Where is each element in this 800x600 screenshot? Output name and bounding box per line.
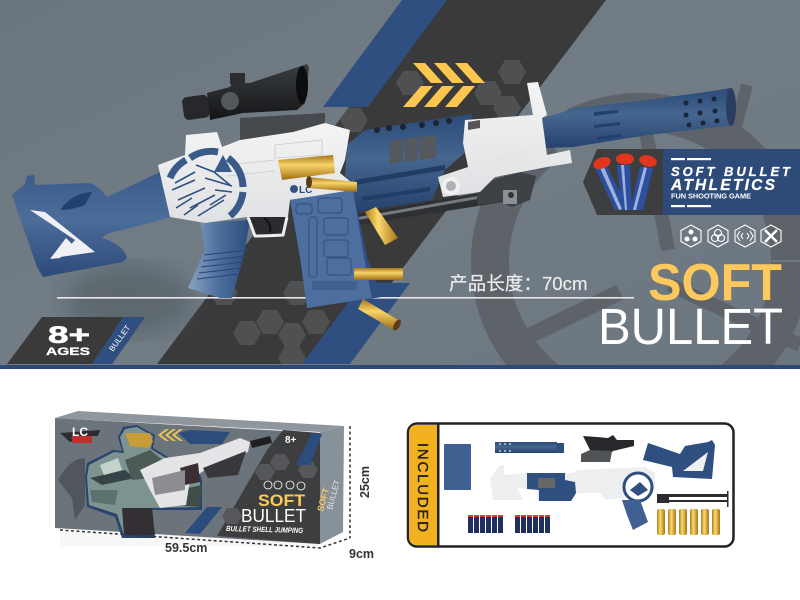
receiver <box>158 123 357 223</box>
bullet tag: BULLET <box>107 323 132 353</box>
box logo: LC <box>72 425 88 439</box>
blue title panel <box>663 149 800 215</box>
age number: 8+ <box>48 322 90 349</box>
soldier figure <box>85 425 202 538</box>
part: stock <box>643 440 715 479</box>
box dragon watermark <box>58 458 85 520</box>
magazine <box>290 190 382 308</box>
darts <box>592 153 658 210</box>
part: bipod <box>657 491 728 507</box>
pistol grip <box>188 220 250 298</box>
length label: 产品长度：70cm <box>449 273 587 294</box>
soldier rifle <box>140 436 272 508</box>
part: darts group one <box>468 515 503 533</box>
scope <box>181 64 309 121</box>
included tab <box>409 425 438 545</box>
blue diagonal stripe upper <box>323 0 447 107</box>
box bullet: BULLET <box>241 506 306 526</box>
part: darts group two <box>515 515 550 533</box>
part: grip <box>622 500 648 530</box>
handguard <box>345 114 472 212</box>
toy gun <box>12 64 736 308</box>
part: scope <box>581 435 634 462</box>
part: shells <box>657 509 720 535</box>
box slogan: BULLET SHELL JUMPING <box>226 524 303 535</box>
box top face <box>55 411 344 432</box>
box logo <box>60 425 100 443</box>
part: magazine <box>444 444 471 490</box>
box chevrons <box>158 429 183 441</box>
age badge <box>7 317 145 364</box>
hexagon pattern <box>210 60 526 370</box>
heading: soft bullet athletics: SOFT BULLET <box>671 164 791 179</box>
chevrons <box>403 63 485 107</box>
product box: BULLET <box>325 479 342 511</box>
box hexagons <box>222 454 318 524</box>
box small banner <box>178 430 230 444</box>
box soft: SOFT <box>258 491 306 510</box>
blue diagonal stripe lower <box>302 283 410 364</box>
box stripes <box>185 507 222 534</box>
feature icons <box>681 225 781 247</box>
stock <box>12 172 172 277</box>
heading: bullet: BULLET <box>598 298 783 355</box>
part: receiver <box>490 465 655 501</box>
bipod rod <box>358 172 536 225</box>
ages text: AGES <box>46 346 90 358</box>
box front face <box>55 418 320 544</box>
scope mount <box>240 113 325 140</box>
box side text: SOFT <box>315 486 331 513</box>
ejection port shell <box>278 155 335 180</box>
box reflection <box>60 532 320 546</box>
ejected shell 2 <box>365 207 398 245</box>
heading: soft: SOFT <box>648 254 782 312</box>
dimension: height: 25cm <box>358 466 372 498</box>
box age: 8+ <box>285 435 297 446</box>
ejected shell 3 <box>354 268 403 280</box>
box dark band <box>217 430 320 544</box>
subtitle: FUN SHOOTING GAME <box>671 192 751 200</box>
dimension: depth: 9cm <box>349 547 374 561</box>
included label: INCLUDED <box>414 443 431 532</box>
title dashes <box>671 158 711 207</box>
barrel and muzzle <box>542 88 736 148</box>
measure line <box>57 297 634 299</box>
ejected shell 1 <box>306 176 357 192</box>
panel: top background <box>0 0 800 365</box>
stock logo <box>30 210 95 259</box>
part: silencer <box>495 442 564 453</box>
panel: soft bullet athletics <box>583 149 800 215</box>
ejected shell 4 <box>358 299 403 332</box>
dimension: width: 59.5cm <box>165 541 207 555</box>
dimension lines <box>60 426 350 548</box>
front white assembly <box>438 82 572 197</box>
product box <box>55 411 344 546</box>
box side face <box>320 426 344 544</box>
lion emblem <box>170 151 243 216</box>
bottom strip <box>0 365 800 369</box>
panel: soft bullet athletics: ATHLETICS <box>670 177 776 194</box>
panel: included <box>408 424 734 546</box>
gear watermark <box>490 85 800 412</box>
dark diagonal band <box>157 0 606 364</box>
dart panel <box>583 149 663 215</box>
brand text: LC <box>299 185 312 196</box>
box icons <box>264 481 305 490</box>
trigger guard <box>248 217 287 236</box>
top rail <box>390 135 436 164</box>
stock shadow <box>65 265 195 335</box>
